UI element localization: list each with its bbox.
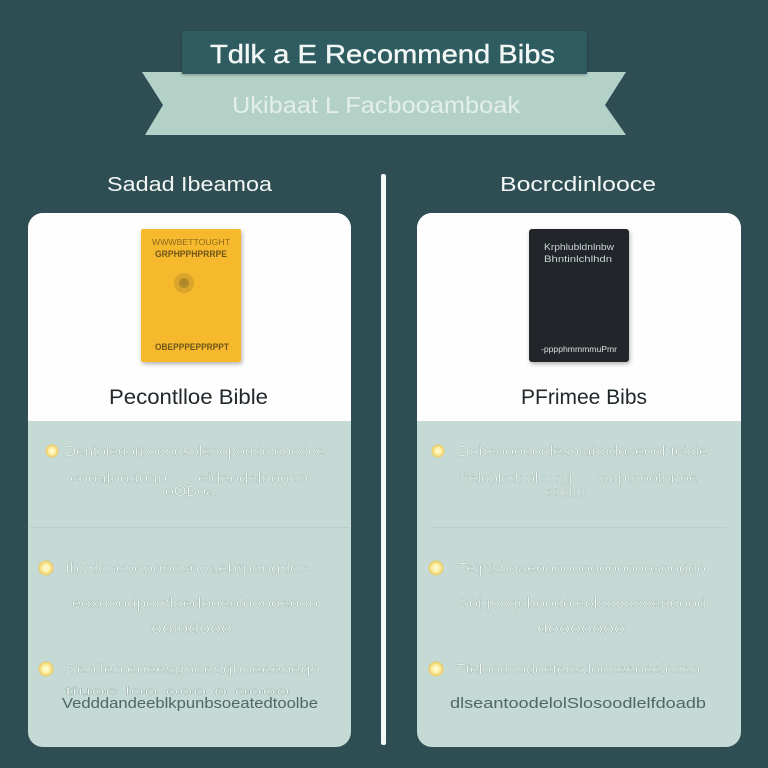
bullet item 2 xyxy=(38,560,318,637)
bullet item 3: tiuoc loo ooo o oooo xyxy=(65,684,291,698)
bullet item 3: Vedddandeeblkpunbsoeatedtoolbe xyxy=(62,695,318,712)
bullet item 1: lodplooolonoe xyxy=(596,470,698,487)
icon: yellow book: GRPHPPHPRRPE xyxy=(155,249,227,259)
bullet item 1: Dehtoledorpooodsbleoopoqdolobodoe xyxy=(65,443,325,460)
icon: black book: -pppphmmmmuPmr xyxy=(541,345,617,354)
right divider xyxy=(432,527,727,528)
bullet item 1: Dobeooodoolesplabodoseoohtciole xyxy=(458,443,708,460)
right column heading: Bocrcdinlooce xyxy=(500,174,656,196)
bullet item 1: eideodelooooo xyxy=(198,470,308,487)
left column heading: Sadad Ibeamoa xyxy=(107,174,273,196)
bullet item 3: dlseantoodelolSlosoodlelfdoadb xyxy=(450,695,706,712)
bullet item 3: Seolleoleoeesgooedqboeeeoeqo xyxy=(65,661,320,678)
bullet item 3 xyxy=(428,661,706,712)
panel: left card xyxy=(28,213,351,747)
right book name: PFrimee Bibs xyxy=(521,386,647,409)
icon: yellow book xyxy=(141,229,241,362)
bullet item 1 xyxy=(46,443,325,500)
bullet item 1: cooaloodono xyxy=(70,470,167,487)
title banner: Tdlk a E Recommend Bibs xyxy=(210,39,555,69)
bullet item 2: oolodooo xyxy=(151,620,232,637)
center divider xyxy=(381,174,386,745)
icon: black book xyxy=(529,229,629,362)
icon: black book: Krphlubldnlnbw xyxy=(544,242,615,252)
bullet item 2: dooooooo xyxy=(537,620,625,637)
icon: yellow book: WWWBETTOUGHT xyxy=(152,238,230,247)
bullet item 1: freloplodnoloong xyxy=(460,470,572,487)
title banner xyxy=(182,31,587,74)
ribbon subtitle: Ukibaat L Facbooamboak xyxy=(232,92,521,118)
left card top xyxy=(28,213,351,421)
bullet item 2 xyxy=(428,560,706,637)
bullet item 1 xyxy=(432,443,708,501)
panel: right card xyxy=(417,213,741,747)
bullet item 2: Soiqooqoboodoleolooooooeqqood xyxy=(458,595,706,612)
icon: yellow book: OBEPPPEPPRPPT xyxy=(155,342,229,352)
bullet item 2: Teipfsboaeooooooooooooosoogdo xyxy=(458,560,706,577)
bullet item 2: Ibpdoccoooooocooaebrpoogdoc xyxy=(65,560,309,577)
ribbon subtitle xyxy=(142,72,626,135)
bullet item 1: eSIdblo xyxy=(545,484,585,501)
bullet item 3 xyxy=(38,661,320,712)
bullet item 1: oOBoa xyxy=(165,483,216,500)
right card top xyxy=(417,213,741,421)
icon: black book: Bhntinlchlhdn xyxy=(544,254,612,264)
bullet item 2: leoxooodpoofloedooeolooooeooo xyxy=(68,595,318,612)
left divider xyxy=(30,527,349,528)
left book name: Pecontlloe Bible xyxy=(109,386,268,409)
bullet item 3: Tteloodoodoeteosdoooeeoeelooeo xyxy=(456,661,700,678)
